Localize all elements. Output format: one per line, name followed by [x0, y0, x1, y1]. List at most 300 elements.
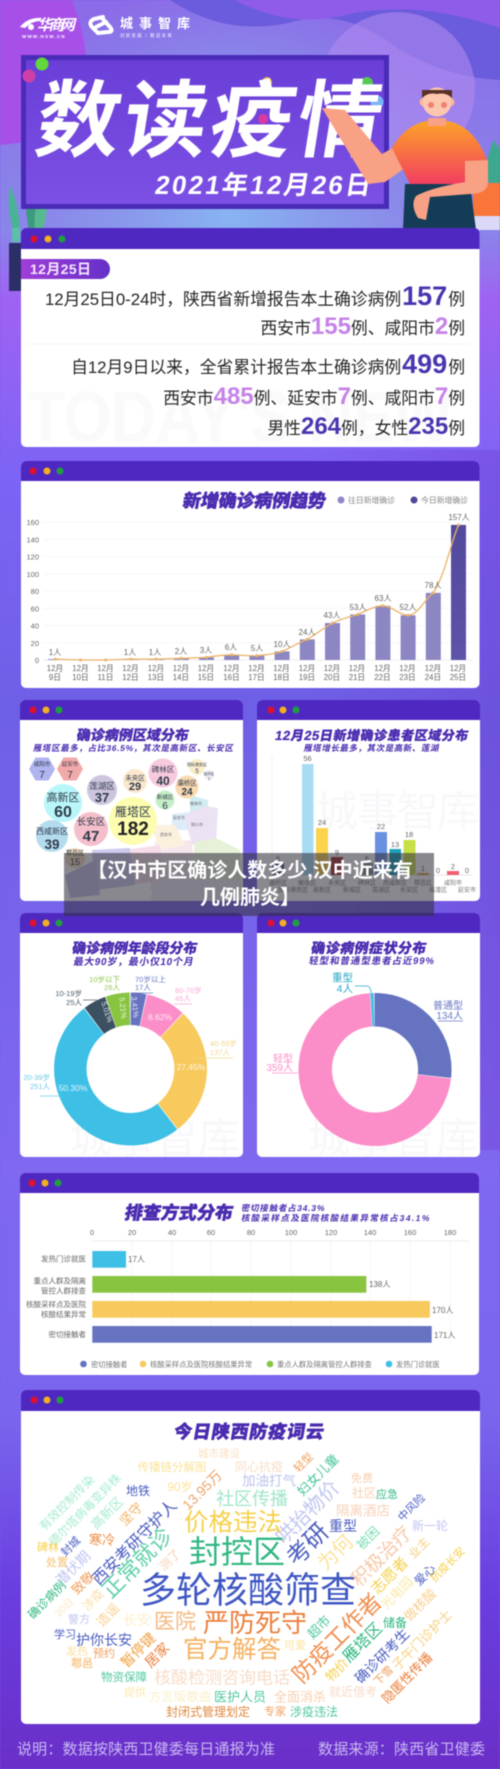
word cloud: 下雪 [371, 1663, 396, 1688]
district labels: 高新区 [313, 886, 331, 894]
x axis: 12月 [122, 664, 139, 673]
x axis: 12月 [299, 664, 315, 673]
legend: 今日新增确诊 [421, 495, 468, 505]
donut labels: 10-19岁 [55, 988, 82, 998]
word cloud: 物价 [322, 1655, 352, 1685]
watermark: 城事智库 [70, 1115, 240, 1162]
word cloud: 免费 [351, 1471, 373, 1485]
y axis: 160 [26, 518, 39, 527]
word cloud: 就近借考 [329, 1685, 377, 1699]
district bubbles: 60 [54, 804, 72, 821]
x axis: 20日 [324, 673, 340, 682]
value labels: 1人 [149, 648, 161, 657]
word cloud: 中风险 [395, 1491, 428, 1524]
panel: new cases by district [257, 700, 480, 901]
district bubbles: 国际港务区 [187, 761, 207, 767]
report text: 西安市155例、咸阳市2例 [261, 313, 465, 340]
x axis: 12月 [324, 664, 340, 673]
y axis [26, 518, 39, 665]
report text: 男性264例，女性235例 [267, 413, 465, 440]
report text: 自12月9日以来，全省累计报告本土确诊病例499例 [71, 349, 465, 379]
report text: 西安市485例、延安市7例、咸阳市7例 [163, 383, 465, 410]
x axis: 25日 [450, 673, 466, 682]
word cloud: 西安考研守护人 [89, 1497, 181, 1589]
value labels: 43人 [324, 611, 340, 620]
footer notes: 数据来源：陕西省卫健委 [318, 1741, 485, 1758]
panel: daily report [21, 228, 480, 458]
legend: 重点人群及隔离管控人群排查 [277, 1360, 373, 1369]
report text: 12月25日0-24时，陕西省新增报告本土确诊病例157例 [45, 281, 465, 311]
district bubbles: 碑林区 [152, 764, 175, 774]
word cloud: 隔离酒店 [336, 1502, 390, 1518]
word cloud: 多轮核酸筛查 [140, 1570, 356, 1610]
word cloud: 涉疫违法 [290, 1704, 338, 1719]
word cloud: 潜伏期 [52, 1547, 94, 1589]
word cloud: 13.95万 [179, 1467, 225, 1513]
x axis: 11日 [98, 673, 113, 682]
district bubbles: 未央区 [125, 773, 145, 782]
word cloud: 封闭式管理划定 [166, 1704, 250, 1719]
x axis: 12月 [450, 664, 466, 673]
word cloud: 被困 [353, 1523, 383, 1553]
word cloud: 医院 [154, 1610, 196, 1634]
donut labels: 普通型 [433, 999, 463, 1012]
legend: 核酸采样点及医院核酸结果异常 [150, 1360, 252, 1369]
x axis: 23日 [399, 673, 416, 682]
watermark: 城事智库 [308, 1115, 478, 1162]
x axis: 12月 [198, 664, 214, 673]
map labels [160, 800, 203, 837]
gridlines [92, 1241, 470, 1345]
x axis: 17日 [248, 673, 265, 682]
donut labels: 4人 [337, 983, 353, 995]
bar categories: 密切接触者 [48, 1329, 86, 1339]
map labels: 延安市 [173, 814, 185, 820]
value labels: 53人 [350, 603, 366, 612]
headline banner: 【汉中市区确诊人数多少,汉中近来有 [87, 858, 413, 882]
word cloud: 居家 [141, 1639, 173, 1671]
date tag [21, 259, 110, 279]
district labels: 新城区 [343, 886, 361, 894]
x axis: 18日 [273, 673, 290, 682]
district bubbles: 鄠邑区 [66, 849, 84, 857]
logo: chengshi zhiku [90, 16, 196, 39]
district bubbles: 雁塔区 [115, 805, 151, 819]
word cloud: 新一轮 [412, 1518, 448, 1533]
headline banner [64, 853, 434, 916]
district bubbles: 24 [181, 787, 193, 798]
x axis: 15日 [198, 673, 214, 682]
district bubbles: 长安区 [77, 816, 106, 828]
y axis: 140 [26, 536, 39, 544]
donut percentages: 50.30% [59, 1083, 88, 1093]
bar values [128, 1255, 455, 1340]
hero panel [21, 55, 390, 209]
donut: symptoms [315, 1010, 435, 1129]
word cloud: 可爱 [284, 1639, 306, 1652]
word cloud: 正常就诊 [97, 1523, 177, 1603]
panel title: 确诊病例区域分布 [75, 727, 190, 743]
value labels: 52人 [400, 603, 416, 612]
bar categories: 核酸采样点及医院 [26, 1299, 86, 1309]
value labels: 6人 [225, 643, 237, 652]
x axis: 12月 [223, 664, 240, 673]
legend: 往日新增确诊 [348, 495, 395, 505]
top axis: 80 [247, 1228, 255, 1237]
donut labels: 251人 [30, 1082, 50, 1091]
word cloud: 业主 [406, 1535, 432, 1561]
word cloud: 核酸检测咨询电话 [154, 1668, 290, 1688]
x axis: 12月 [148, 664, 164, 673]
x axis: 21日 [349, 673, 365, 682]
x axis: 14日 [173, 673, 189, 682]
word cloud: 储备 [383, 1615, 407, 1630]
donut labels: 40-59岁 [210, 1038, 237, 1048]
x axis: 12月 [399, 664, 416, 673]
word cloud: 子午门诊护士 [389, 1607, 455, 1673]
values: 6 [365, 854, 369, 863]
logo: huashang [20, 17, 77, 39]
word cloud: 社区 [352, 1485, 376, 1500]
district bubbles: 新城区 [157, 793, 174, 801]
word cloud [24, 1447, 468, 1719]
donut labels: 25人 [66, 998, 82, 1007]
illustration: presenter [322, 88, 500, 230]
district bubbles: 7 [67, 770, 73, 781]
district labels: 咸阳市 [444, 879, 462, 887]
district bubbles: 15 [70, 857, 80, 867]
district labels: 西咸新区 [383, 879, 407, 887]
word cloud: 确诊研考生 [352, 1626, 412, 1686]
word cloud: 警方 [68, 1612, 90, 1626]
x axis: 12月 [349, 664, 365, 673]
district bubbles: 47 [83, 828, 99, 845]
word cloud: 有效控制传染 [36, 1472, 97, 1533]
donut percentages [59, 996, 206, 1093]
value labels: 10人 [274, 640, 290, 649]
district bubbles: 1 [208, 776, 211, 781]
word cloud: 积极治疗 [347, 1522, 416, 1591]
x axis: 24日 [425, 673, 441, 682]
x axis: 12月 [425, 664, 441, 673]
top axis: 40 [168, 1228, 176, 1237]
top axis: 20 [128, 1228, 136, 1237]
donut labels: 60-70岁 [175, 985, 202, 995]
word cloud: 应急 [376, 1487, 398, 1501]
top axis: 0 [90, 1228, 94, 1237]
word cloud: 封控区 [189, 1534, 285, 1570]
word cloud: 致敬 [68, 1568, 98, 1598]
word cloud: 坚守 [116, 1499, 146, 1529]
word cloud: 爱心 [412, 1562, 438, 1588]
bar categories: 发热门诊就医 [41, 1254, 86, 1264]
word cloud: 碑林 [37, 1540, 59, 1554]
word cloud: 重型 [329, 1518, 357, 1534]
hero plants [9, 140, 500, 291]
word cloud: 哄抬物价 [271, 1476, 344, 1549]
word cloud: 地铁 [126, 1484, 150, 1498]
word cloud: 封城 [58, 1534, 83, 1559]
y axis: 0 [35, 656, 39, 665]
district labels: 临潼区 [429, 886, 447, 894]
donut percentages: 27.45% [177, 1062, 206, 1072]
word cloud: 传播链分解图 [138, 1460, 206, 1474]
word cloud: 志愿者 [368, 1554, 412, 1598]
watermark: 城事智库 [316, 788, 479, 835]
donut labels: 137人 [210, 1048, 231, 1057]
subtitle: 雁塔增长最多，其次是高新、莲湖 [303, 742, 441, 753]
district bubbles: 39 [44, 837, 60, 852]
word cloud: 方言版歌曲 [149, 1689, 211, 1704]
subtitle: 轻型和普通型患者占近99% [308, 955, 436, 967]
y axis: 20 [31, 639, 39, 648]
donut percentages: 8.62% [148, 1012, 172, 1022]
panel: district distribution [20, 700, 243, 901]
donut: age [70, 1009, 191, 1129]
word cloud: 价格违法 [184, 1508, 282, 1536]
word cloud: 妇女儿童 [294, 1451, 342, 1499]
bar categories: 核酸结果异常 [41, 1309, 86, 1319]
district labels [269, 879, 476, 894]
district bubbles: 西咸新区 [36, 826, 68, 836]
top axis: 140 [364, 1228, 376, 1237]
donut labels: 134人 [436, 1010, 463, 1022]
map labels: 铜川市 [191, 821, 203, 827]
x axis: 22日 [374, 673, 391, 682]
gridlines [43, 522, 472, 660]
word cloud: 长安 [123, 1612, 151, 1628]
word cloud: 严防死守 [203, 1608, 307, 1638]
bar values: 138人 [369, 1280, 390, 1289]
word cloud: 为何 [313, 1530, 358, 1575]
word cloud: 隐匿性传播 [379, 1650, 435, 1706]
map labels: 西安市 [160, 831, 172, 837]
value labels: 5人 [251, 644, 263, 653]
values: 24 [318, 818, 326, 827]
values: 0 [465, 866, 469, 875]
district bubbles: 高新区 [46, 790, 80, 804]
value labels: 24人 [299, 628, 315, 637]
headline banner: 几例肺炎】 [200, 886, 300, 909]
district labels: 灞桥区 [269, 879, 287, 887]
panel title: 排查方式分布 [123, 1202, 235, 1223]
word cloud: 寒冷 [89, 1532, 115, 1548]
chart title: 新增确诊病例趋势 [181, 490, 328, 511]
district bubbles: 5 [195, 769, 199, 775]
values: 6 [276, 854, 280, 863]
word cloud: 轻型 [291, 1450, 316, 1475]
x axis: 12月 [47, 664, 63, 673]
word cloud: 学习 [54, 1627, 76, 1641]
donut labels: 26人 [104, 983, 120, 992]
x axis: 12月 [97, 664, 114, 673]
x axis: 12月 [273, 664, 290, 673]
word cloud: 全面消杀 [274, 1690, 326, 1704]
word cloud: 专家 [264, 1704, 286, 1718]
word cloud: 加油打气 [242, 1472, 296, 1488]
word cloud: 社区传播 [216, 1489, 288, 1509]
hero title: 数读疫情 [30, 73, 390, 168]
word cloud: 护你长安 [76, 1632, 132, 1648]
word cloud: 90岁 [167, 1479, 193, 1494]
district labels: 碑林区 [358, 879, 376, 887]
values: 2 [451, 862, 455, 871]
donut labels: 20-39岁 [23, 1072, 50, 1082]
district bubbles: 37 [95, 790, 109, 805]
word cloud: 提供 [124, 1685, 146, 1699]
donut labels: 10岁以下 [89, 974, 120, 984]
district bubbles: 7 [39, 770, 45, 781]
panel: word cloud [21, 1390, 480, 1724]
logo: huashang: 华商网 [37, 17, 77, 34]
legend: 密切接触者 [91, 1360, 127, 1369]
donut labels: 17人 [135, 983, 151, 992]
word cloud: 雁塔区 [339, 1619, 386, 1666]
x axis: 19日 [299, 673, 315, 682]
district labels: 莲湖区 [372, 886, 390, 894]
donut labels [266, 971, 463, 1074]
x axis: 12月 [173, 664, 189, 673]
map of shaanxi [65, 795, 242, 901]
x axis: 9日 [49, 673, 61, 682]
value labels: 3人 [200, 646, 212, 655]
bar values: 171人 [434, 1331, 455, 1340]
district bubbles [29, 758, 215, 868]
bars [92, 1251, 432, 1343]
value labels: 1人 [124, 648, 136, 657]
donut labels: 359人 [266, 1062, 293, 1074]
bar values: 170人 [432, 1306, 453, 1315]
bar categories [26, 1254, 86, 1339]
district bubbles: 延安市 [62, 760, 79, 768]
values: 0 [436, 866, 440, 875]
x axis: 12月 [72, 664, 89, 673]
bars [48, 525, 466, 660]
y axis: 120 [26, 552, 39, 562]
value labels [49, 513, 470, 657]
district labels: 未央区 [328, 879, 346, 887]
bars [272, 764, 459, 875]
y axis: 100 [26, 570, 39, 579]
word cloud: 考研 [281, 1518, 335, 1572]
district bubbles: 182 [117, 819, 149, 840]
panel title: 确诊病例年龄段分布 [71, 940, 199, 956]
donut percentages: 5.01% [99, 1000, 115, 1024]
top axis: 180 [444, 1228, 456, 1237]
hero date: 2021年12月26日 [153, 170, 374, 200]
word cloud: 官方解答 [183, 1636, 281, 1664]
subtitle: 密切接触者占34.3% [241, 1202, 326, 1213]
word cloud: 处置 [46, 1556, 68, 1569]
footer notes [17, 1741, 485, 1758]
panel: symptom distribution [257, 913, 480, 1162]
subtitle [241, 1202, 431, 1223]
panel title: 今日陕西防疫词云 [172, 1421, 326, 1442]
bar categories: 重点人群及隔离 [34, 1276, 86, 1286]
logo: chengshi zhiku: 城事智库 [120, 16, 196, 31]
x axis: 12日 [122, 673, 139, 682]
district bubbles: 29 [129, 781, 141, 793]
district bubbles: 6 [162, 801, 168, 812]
date tag: 12月25日 [30, 261, 91, 277]
word cloud: 涉疫 [79, 1586, 106, 1613]
x axis: 12月 [374, 664, 391, 673]
value labels: 157人 [448, 513, 470, 522]
x axis [47, 664, 466, 682]
word cloud: 抗疫长安 [427, 1544, 468, 1585]
values: 18 [405, 830, 413, 839]
subtitle: 雁塔区最多，占比36.5%，其次是高新区、长安区 [33, 742, 235, 753]
word cloud: 城市建设 [198, 1447, 240, 1460]
hero dots [22, 58, 384, 124]
legend: 发热门诊就医 [396, 1360, 440, 1369]
word cloud: 造谣 [93, 1600, 123, 1630]
top axis: 100 [285, 1228, 297, 1237]
word cloud: 物资保障 [101, 1670, 147, 1684]
legend [80, 1360, 440, 1369]
x axis: 10日 [72, 673, 89, 682]
donut labels [23, 974, 237, 1096]
value labels: 63人 [375, 594, 391, 603]
top axis: 60 [207, 1228, 215, 1237]
word cloud: 防疫工作者 [287, 1588, 387, 1688]
word cloud: 20日 [54, 1597, 76, 1619]
value labels: 2人 [175, 647, 187, 656]
donut labels: 重型 [332, 971, 353, 984]
bar values: 17人 [128, 1255, 145, 1264]
donut labels: 轻型 [273, 1052, 293, 1065]
panel title: 12月25日新增确诊患者区域分布 [274, 727, 470, 743]
district bubbles: 莲湖区 [89, 781, 115, 791]
top axis: 160 [404, 1228, 416, 1237]
trend line [54, 523, 460, 662]
values [276, 754, 469, 875]
values: 1 [421, 864, 425, 873]
panel: age distribution [20, 913, 243, 1162]
district bubbles: 40 [156, 774, 170, 788]
y axis: 60 [31, 604, 39, 614]
footer notes: 说明：数据按陕西卫健委每日通报为准 [17, 1741, 275, 1758]
logo: chengshi zhiku: 创新发展 / 数说未来 [120, 32, 173, 39]
panel title: 确诊病例症状分布 [310, 940, 428, 956]
district bubbles: 咸阳市 [34, 760, 51, 768]
word cloud: 做核酸 [401, 1586, 439, 1624]
x axis: 13日 [148, 673, 164, 682]
word cloud: 高新区 [88, 1494, 126, 1532]
district bubbles: 经开区 [204, 771, 215, 776]
y axis: 80 [31, 587, 39, 596]
top axis [90, 1228, 456, 1237]
x axis: 16日 [223, 673, 240, 682]
logos [20, 16, 196, 39]
map labels: 榆林市 [190, 800, 202, 806]
district labels: 国际港务区 [278, 886, 308, 894]
value labels: 1人 [49, 648, 61, 657]
legend [338, 495, 468, 505]
values: 56 [303, 754, 312, 763]
panel: trend chart [21, 461, 480, 688]
x axis: 12月 [248, 664, 265, 673]
report text [45, 281, 465, 440]
bar categories: 管控人群排查 [41, 1286, 86, 1296]
word cloud: 发热 [66, 1644, 88, 1658]
value labels: 78人 [425, 581, 441, 590]
donut percentages: 3.41% [129, 996, 141, 1018]
word cloud: 光电园 [378, 1574, 416, 1612]
logo: huashang: WWW.HSW.CN [22, 34, 66, 39]
donut labels: 70岁以上 [135, 974, 166, 984]
word cloud: 测了 [157, 1547, 183, 1573]
